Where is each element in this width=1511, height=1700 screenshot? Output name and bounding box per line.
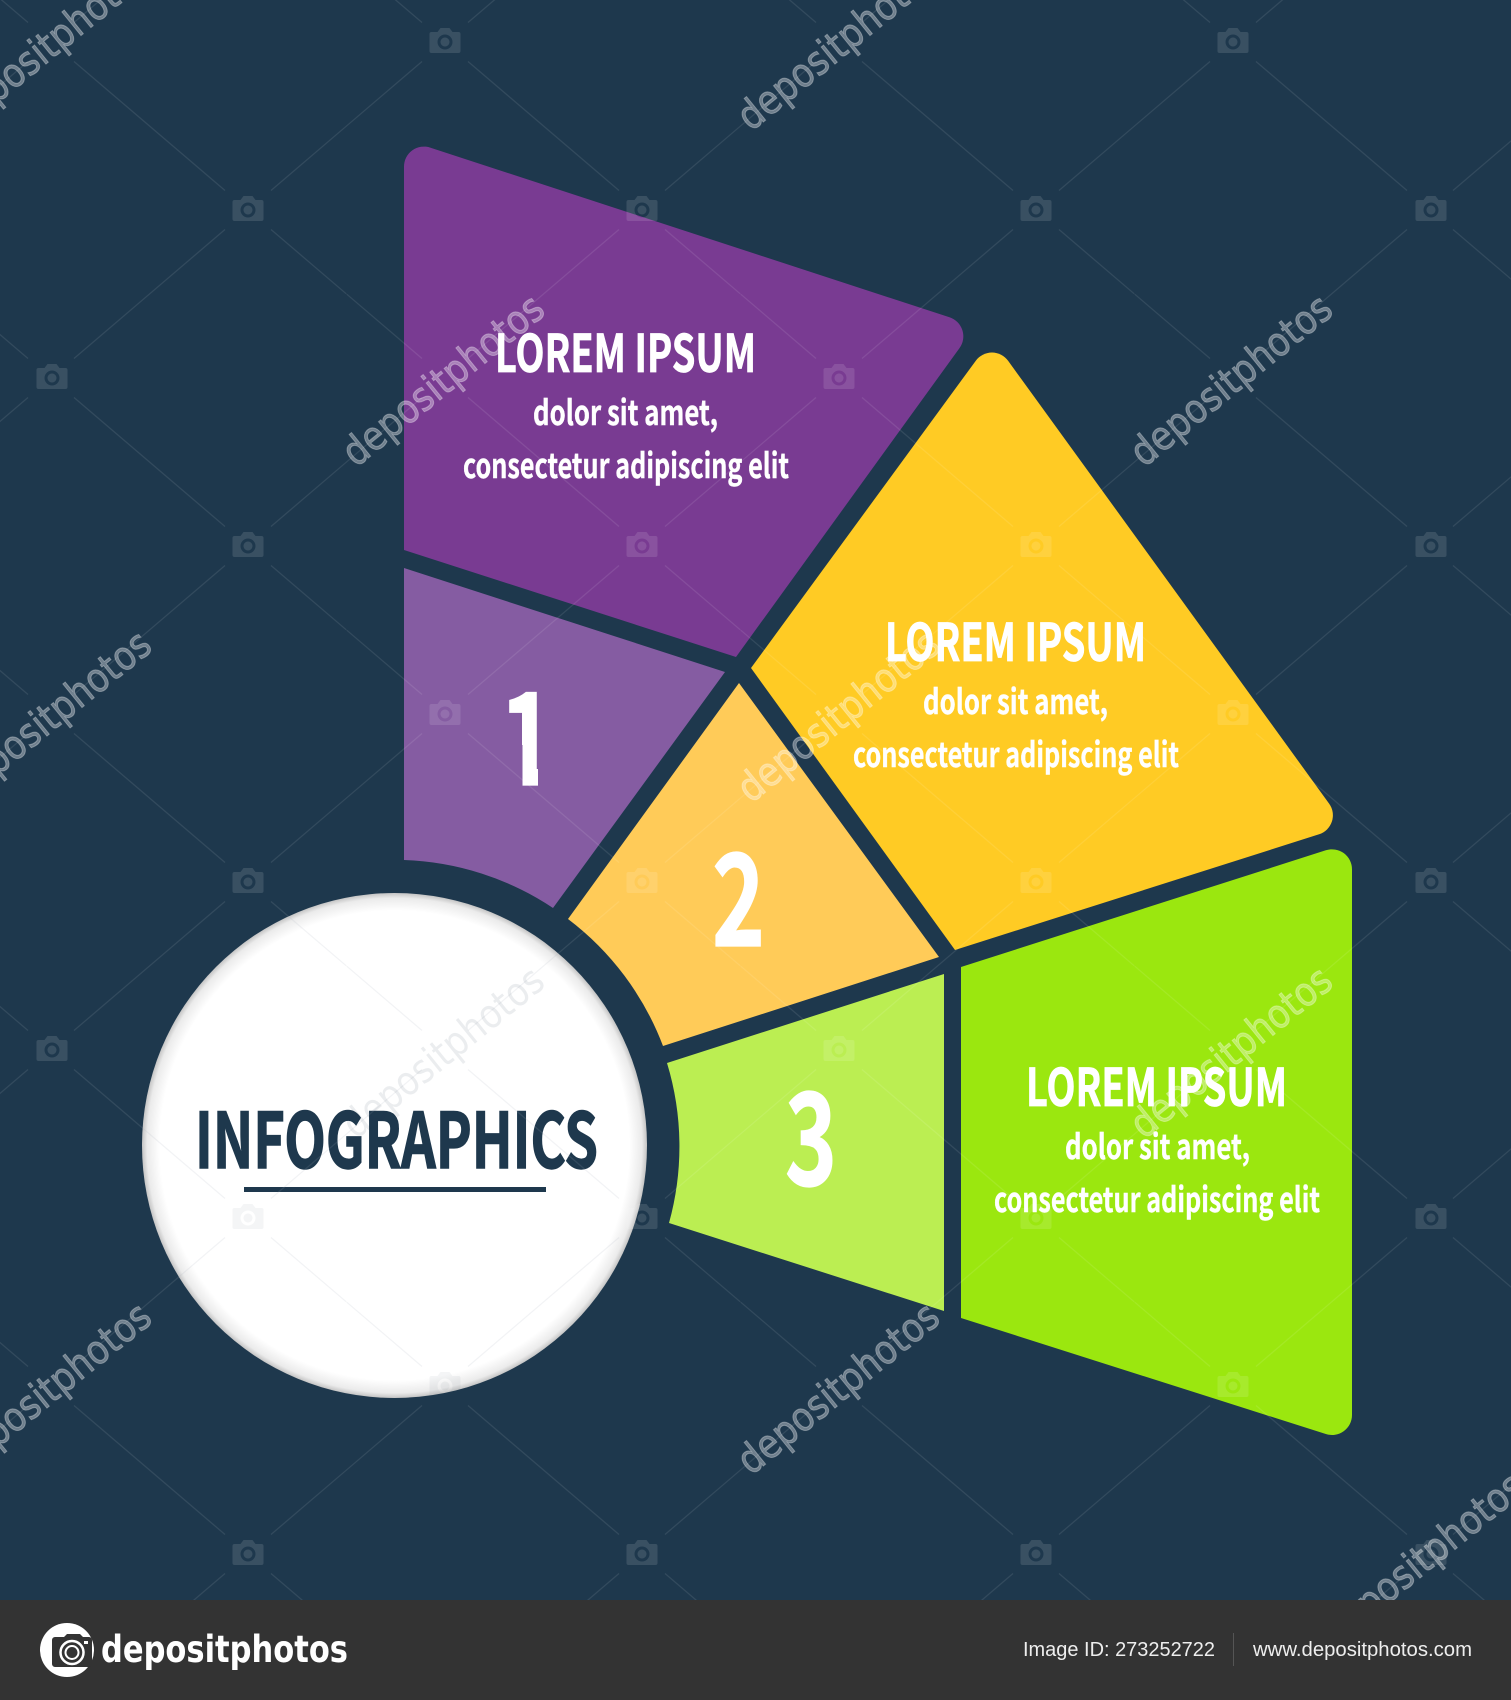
watermarks: depositphotos	[333, 285, 553, 476]
line 1: dolor sit amet,	[923, 675, 1108, 724]
heading: LOREM IPSUM	[1026, 1046, 1287, 1121]
panel: step 3 text card	[961, 849, 1352, 1435]
heading: LOREM IPSUM	[885, 601, 1146, 676]
circle title: INFOGRAPHICS	[195, 1080, 598, 1190]
image id: Image ID: 273252722	[1023, 1639, 1215, 1661]
watermarks: depositphotos	[728, 1293, 948, 1484]
panel: step 2 text card	[751, 353, 1333, 950]
line 2: consectetur adipiscing elit	[853, 728, 1179, 777]
step 1 text block	[463, 312, 789, 488]
title underline	[244, 1187, 546, 1192]
watermarks: depositphotos	[1121, 285, 1341, 476]
step 3	[667, 849, 1352, 1435]
number 3: 3	[785, 1037, 837, 1222]
step 1	[404, 147, 963, 908]
watermarks: depositphotos	[333, 957, 553, 1148]
panel: step 1 text card	[404, 147, 963, 657]
step 2	[568, 353, 1333, 1046]
step 3 text block	[994, 1046, 1320, 1222]
panel: step 3 number card	[667, 974, 944, 1311]
panel: step 2 number card	[568, 683, 939, 1046]
number 1: 1	[500, 637, 556, 822]
step 2 text block	[853, 601, 1179, 777]
watermarks: depositphotos	[1121, 957, 1341, 1148]
footer bar	[0, 1600, 1511, 1700]
line 1: dolor sit amet,	[533, 386, 718, 435]
number 2: 2	[712, 798, 765, 983]
icon: camera logo	[40, 1623, 94, 1677]
white disc	[142, 893, 647, 1398]
line 1: dolor sit amet,	[1065, 1120, 1250, 1169]
heading: LOREM IPSUM	[495, 312, 756, 387]
logo wordmark: depositphotos	[101, 1628, 348, 1671]
website url: www.depositphotos.com	[1252, 1639, 1472, 1661]
central circle	[142, 893, 647, 1398]
watermarks: depositphotos	[728, 621, 948, 812]
line 2: consectetur adipiscing elit	[463, 439, 789, 488]
line 2: consectetur adipiscing elit	[994, 1173, 1320, 1222]
panel: step 1 number card	[404, 568, 725, 908]
